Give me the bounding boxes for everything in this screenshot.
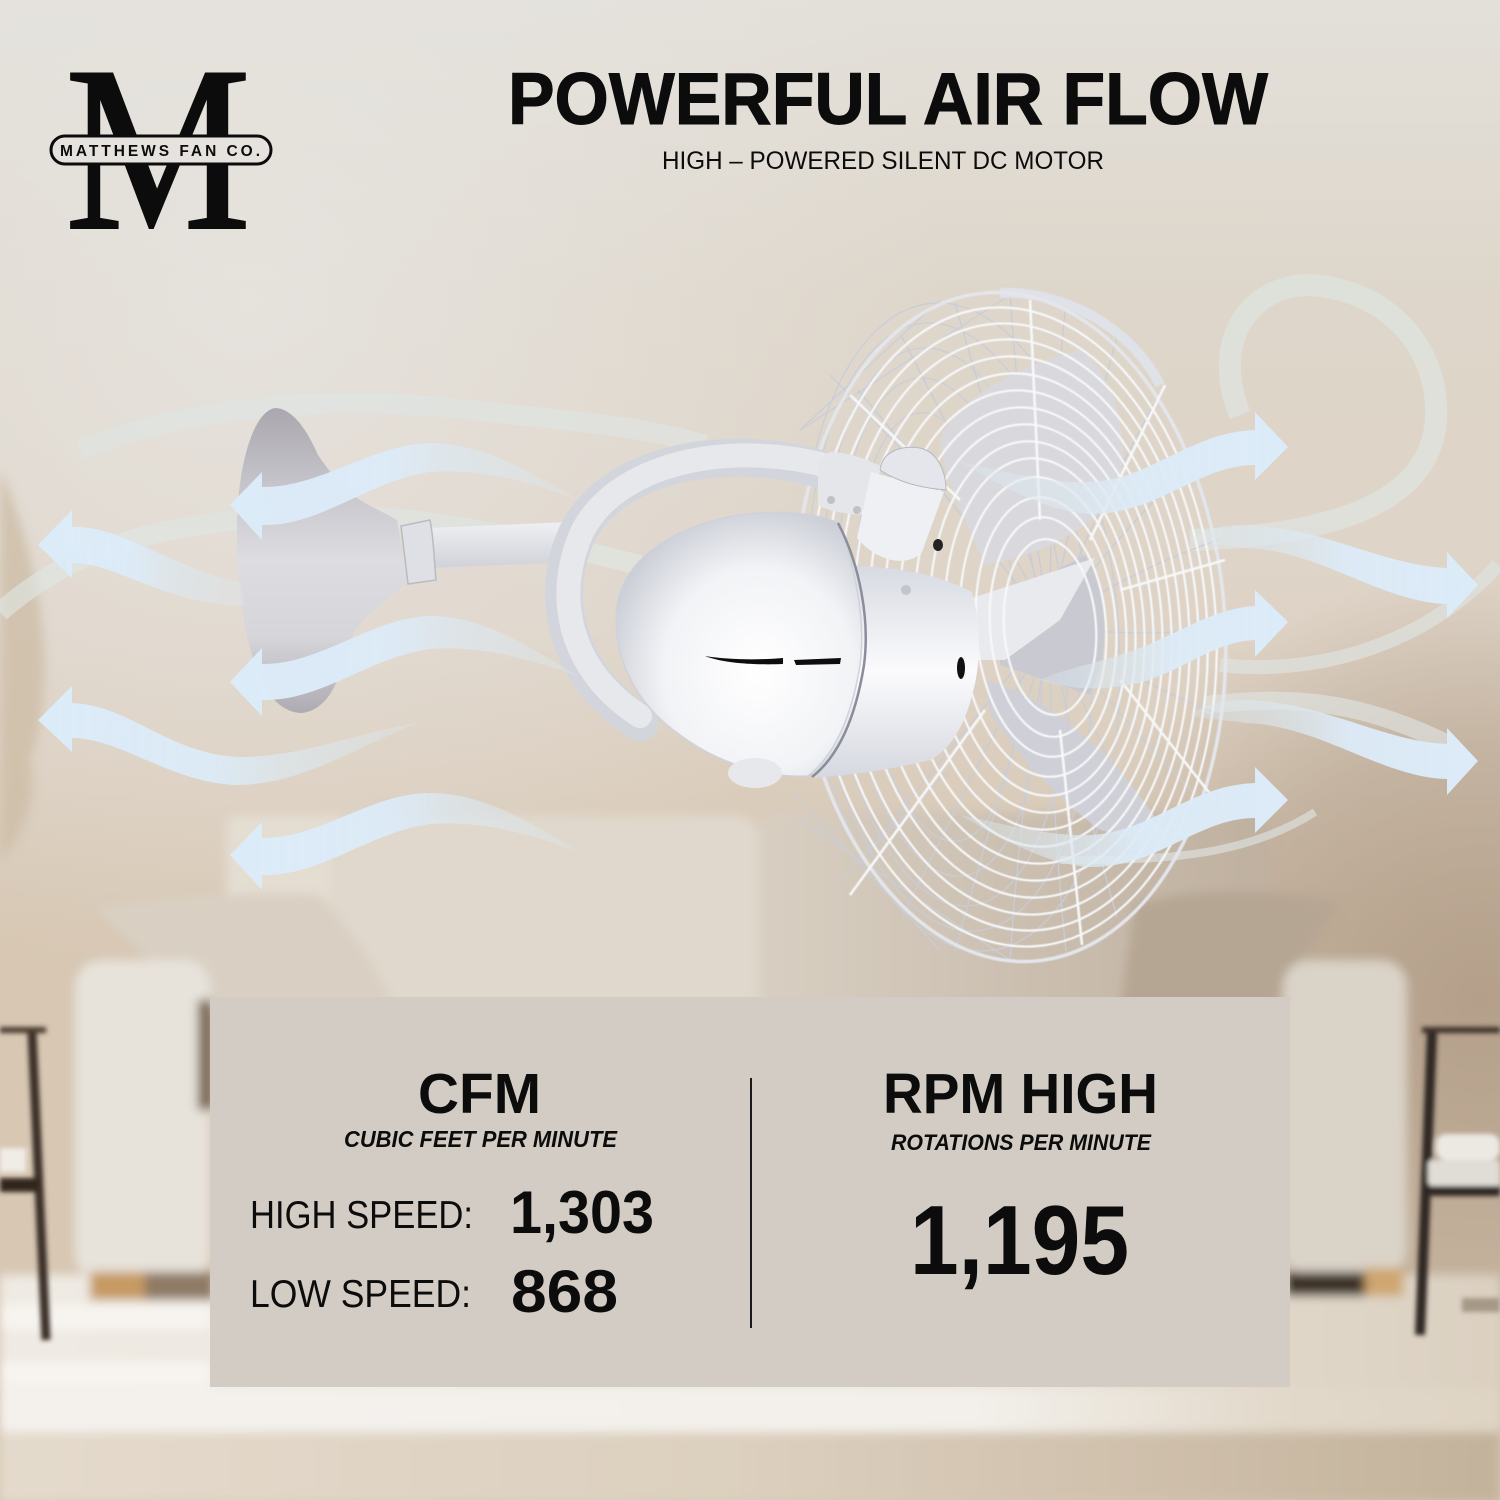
motor seam — [812, 523, 866, 777]
CFM heading: CFM — [418, 1062, 541, 1126]
fan — [237, 278, 1248, 976]
wall mount bell — [237, 408, 407, 713]
speed slots — [705, 656, 841, 665]
right chair — [1420, 1032, 1432, 1335]
screw — [901, 585, 911, 595]
mount collar — [401, 520, 436, 584]
left chair — [32, 1032, 46, 1340]
lower base knob — [728, 758, 782, 788]
clamp screws — [827, 496, 861, 514]
RPM heading: RPM HIGH — [883, 1062, 1158, 1126]
motor rear dome — [616, 512, 862, 776]
high speed value: 1,303 — [510, 1179, 654, 1246]
title: POWERFUL AIR FLOW — [508, 59, 1268, 140]
pale air wisps behind the fan — [0, 285, 1498, 860]
high speed label: HIGH SPEED: — [250, 1194, 473, 1237]
divider — [750, 1078, 752, 1328]
motor front shroud — [812, 565, 979, 778]
airflow arrows, right — [960, 412, 1478, 867]
low speed label: LOW SPEED: — [250, 1273, 471, 1316]
RPM subheading: ROTATIONS PER MINUTE — [891, 1130, 1152, 1155]
stats panel — [210, 997, 1290, 1387]
neck — [857, 472, 944, 561]
upper blade — [940, 350, 1123, 565]
back wire cage — [774, 289, 1146, 965]
front wire cage — [772, 278, 1248, 976]
arm clamp — [818, 452, 880, 515]
fan blades — [940, 350, 1172, 845]
logo: M — [65, 19, 251, 280]
subtitle: HIGH – POWERED SILENT DC MOTOR — [662, 147, 1104, 175]
logo name pill — [51, 136, 271, 164]
plant blur — [0, 470, 44, 860]
middle blade — [1000, 555, 1105, 695]
arm straight tube — [428, 522, 570, 568]
lower blade — [985, 680, 1172, 845]
low speed value: 868 — [511, 1258, 618, 1325]
shroud black socket — [957, 657, 965, 679]
motor knob — [880, 447, 946, 490]
CFM subheading: CUBIC FEET PER MINUTE — [344, 1126, 618, 1152]
RPM value: 1,195 — [910, 1185, 1129, 1295]
airflow arrows, left — [38, 443, 580, 890]
floor — [0, 1275, 1500, 1390]
looping arm tube — [564, 455, 830, 722]
thin radial wires — [858, 292, 1225, 962]
logo name text: MATTHEWS FAN CO. — [60, 143, 260, 160]
sofa back — [226, 815, 346, 925]
sofa arms — [75, 960, 210, 1280]
black spot on shroud — [933, 539, 943, 551]
hub bracket — [972, 558, 1095, 660]
